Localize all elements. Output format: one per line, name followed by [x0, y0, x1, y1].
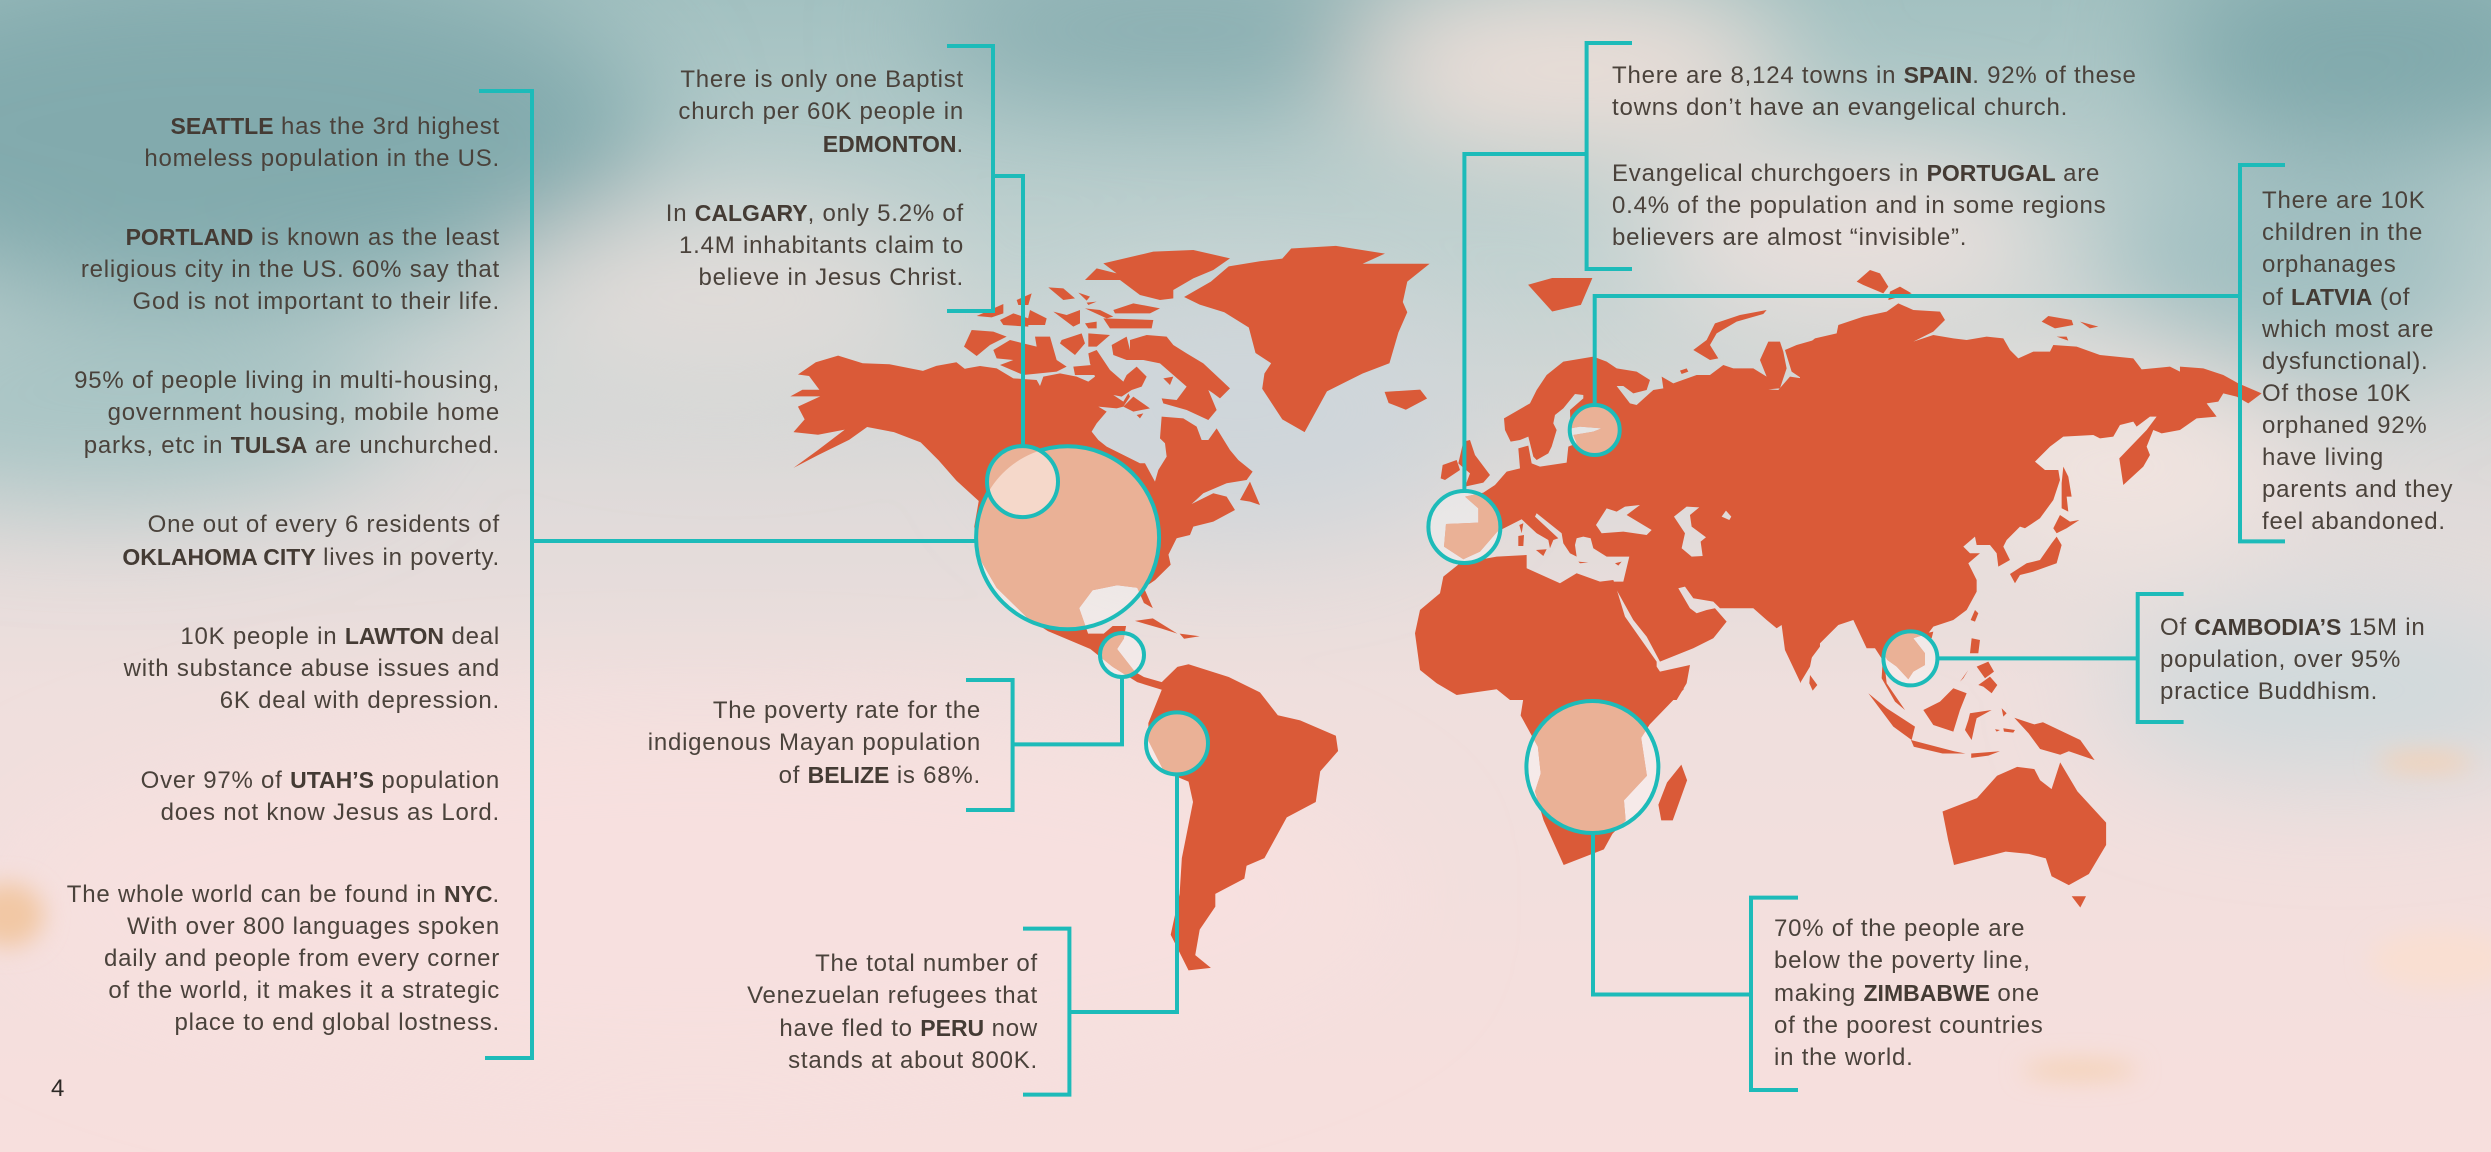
text: Peru: stands at about 800K. — [788, 1047, 1038, 1074]
callout lines: Belize — [966, 677, 1122, 810]
callout lines: Spain and Portugal — [1464, 43, 1632, 491]
text: Portland: God is not important to their life. — [133, 288, 500, 315]
text: Peru: have fled to PERU now — [779, 1015, 1038, 1042]
text: Zimbabwe: making ZIMBABWE one — [1774, 980, 2040, 1007]
text: Latvia: There are 10K — [2262, 187, 2426, 214]
page number: 4 — [51, 1075, 65, 1102]
text: NYC: With over 800 languages spoken — [127, 913, 500, 940]
highlight: Latvia — [1568, 403, 1622, 457]
text: Portland: PORTLAND is known as the least — [126, 224, 500, 251]
text: Tulsa: parks, etc in TULSA are unchurched. — [84, 432, 500, 459]
text: Zimbabwe: of the poorest countries — [1774, 1012, 2044, 1039]
text: Peru: The total number of — [815, 950, 1038, 977]
highlight: USA — [974, 444, 1162, 632]
text: Seattle — [144, 113, 500, 172]
text: Belize: of BELIZE is 68%. — [779, 762, 981, 789]
text: Cambodia: population, over 95% — [2160, 646, 2401, 673]
text: NYC — [67, 881, 500, 1036]
text: Latvia: Of those 10K — [2262, 380, 2411, 407]
text: Lawton: 6K deal with depression. — [220, 687, 500, 714]
text: Spain and Portugal: towns don’t have an evangelical church. — [1612, 94, 2068, 121]
highlight: Zimbabwe — [1524, 699, 1660, 835]
text: Lawton — [124, 623, 500, 714]
text: Portland — [81, 224, 500, 315]
callout lines: USA — [479, 91, 975, 1058]
text: Utah — [141, 767, 500, 826]
text: NYC: daily and people from every corner — [104, 945, 500, 972]
text: Belize: indigenous Mayan population — [648, 729, 981, 756]
callout lines: Zimbabwe — [1593, 833, 1798, 1090]
text: Latvia: orphaned 92% — [2262, 412, 2428, 439]
text: Spain and Portugal: There are 8,124 towns in SPAIN. 92% of these — [1612, 62, 2137, 89]
text: Cambodia: Of CAMBODIA’S 15M in — [2160, 614, 2425, 641]
text: Edmonton and Calgary: EDMONTON. — [823, 131, 964, 158]
text: Utah: does not know Jesus as Lord. — [161, 799, 500, 826]
text: Tulsa — [74, 367, 500, 459]
text: Edmonton and Calgary: 1.4M inhabitants claim to — [679, 232, 964, 259]
text: Latvia: dysfunctional). — [2262, 348, 2428, 375]
text: Zimbabwe: 70% of the people are — [1774, 915, 2025, 942]
text: Edmonton and Calgary: believe in Jesus Christ. — [698, 264, 964, 291]
text: NYC: of the world, it makes it a strategic — [108, 977, 500, 1004]
text: Latvia: of LATVIA (of — [2262, 284, 2410, 311]
text: NYC: The whole world can be found in NYC. — [67, 881, 500, 908]
text: Latvia: have living — [2262, 444, 2384, 471]
text: Edmonton and Calgary — [666, 66, 964, 291]
text: Lawton: with substance abuse issues and — [124, 655, 500, 682]
text: Spain and Portugal: 0.4% of the population and in some regions — [1612, 192, 2106, 219]
text: Latvia: orphanages — [2262, 251, 2397, 278]
text: Tulsa: 95% of people living in multi-housing, — [74, 367, 500, 394]
text: Edmonton and Calgary: There is only one Baptist — [680, 66, 964, 93]
text: Spain and Portugal — [1612, 62, 2137, 251]
text: Cambodia — [2160, 611, 2425, 708]
text: Spain and Portugal: believers are almost “invisible”. — [1612, 224, 1967, 251]
highlight: Cambodia — [1881, 629, 1940, 688]
highlight: Canada — [985, 444, 1060, 520]
text: Cambodia: practice Buddhism. — [2160, 678, 2378, 705]
map: Americas — [790, 246, 1430, 970]
text: Zimbabwe: below the poverty line, — [1774, 947, 2031, 974]
text: Peru: Venezuelan refugees that — [747, 982, 1038, 1009]
text: Utah: Over 97% of UTAH’S population — [141, 767, 500, 794]
text: Oklahoma City — [122, 511, 500, 571]
text: Latvia — [2262, 187, 2453, 535]
highlight: Belize — [1098, 631, 1146, 679]
text: Zimbabwe: in the world. — [1774, 1044, 1914, 1071]
text: Lawton: 10K people in LAWTON deal — [180, 623, 500, 650]
text: Seattle: homeless population in the US. — [144, 145, 500, 172]
highlight: Spain and Portugal — [1426, 489, 1502, 565]
text: Portland: religious city in the US. 60% say that — [81, 256, 500, 283]
text: NYC: place to end global lostness. — [174, 1009, 500, 1036]
text: Spain and Portugal: Evangelical churchgoers in PORTUGAL are — [1612, 160, 2100, 187]
text: Peru — [747, 950, 1038, 1074]
text: Belize — [648, 697, 981, 789]
text: Tulsa: government housing, mobile home — [108, 399, 500, 426]
text: Latvia: which most are — [2262, 316, 2434, 343]
text: Latvia: feel abandoned. — [2262, 508, 2446, 535]
text: Zimbabwe — [1774, 913, 2044, 1074]
callout lines: Latvia — [1595, 165, 2285, 541]
text: Edmonton and Calgary: In CALGARY, only 5.2% of — [666, 200, 964, 227]
text: Belize: The poverty rate for the — [713, 697, 981, 724]
text: Latvia: parents and they — [2262, 476, 2453, 503]
callout lines: Cambodia — [1937, 594, 2184, 722]
text: Edmonton and Calgary: church per 60K people in — [678, 98, 964, 125]
text: Oklahoma City: One out of every 6 residents of — [148, 511, 500, 538]
text: Oklahoma City: OKLAHOMA CITY lives in poverty. — [122, 544, 500, 571]
text: Latvia: children in the — [2262, 219, 2423, 246]
text: Seattle: SEATTLE has the 3rd highest — [170, 113, 500, 140]
callout lines: Canada — [947, 46, 1023, 446]
map: Europe, Africa, Asia, Australia — [1385, 270, 2262, 907]
callout lines: Peru — [1023, 774, 1177, 1095]
highlight: Peru — [1144, 710, 1210, 776]
